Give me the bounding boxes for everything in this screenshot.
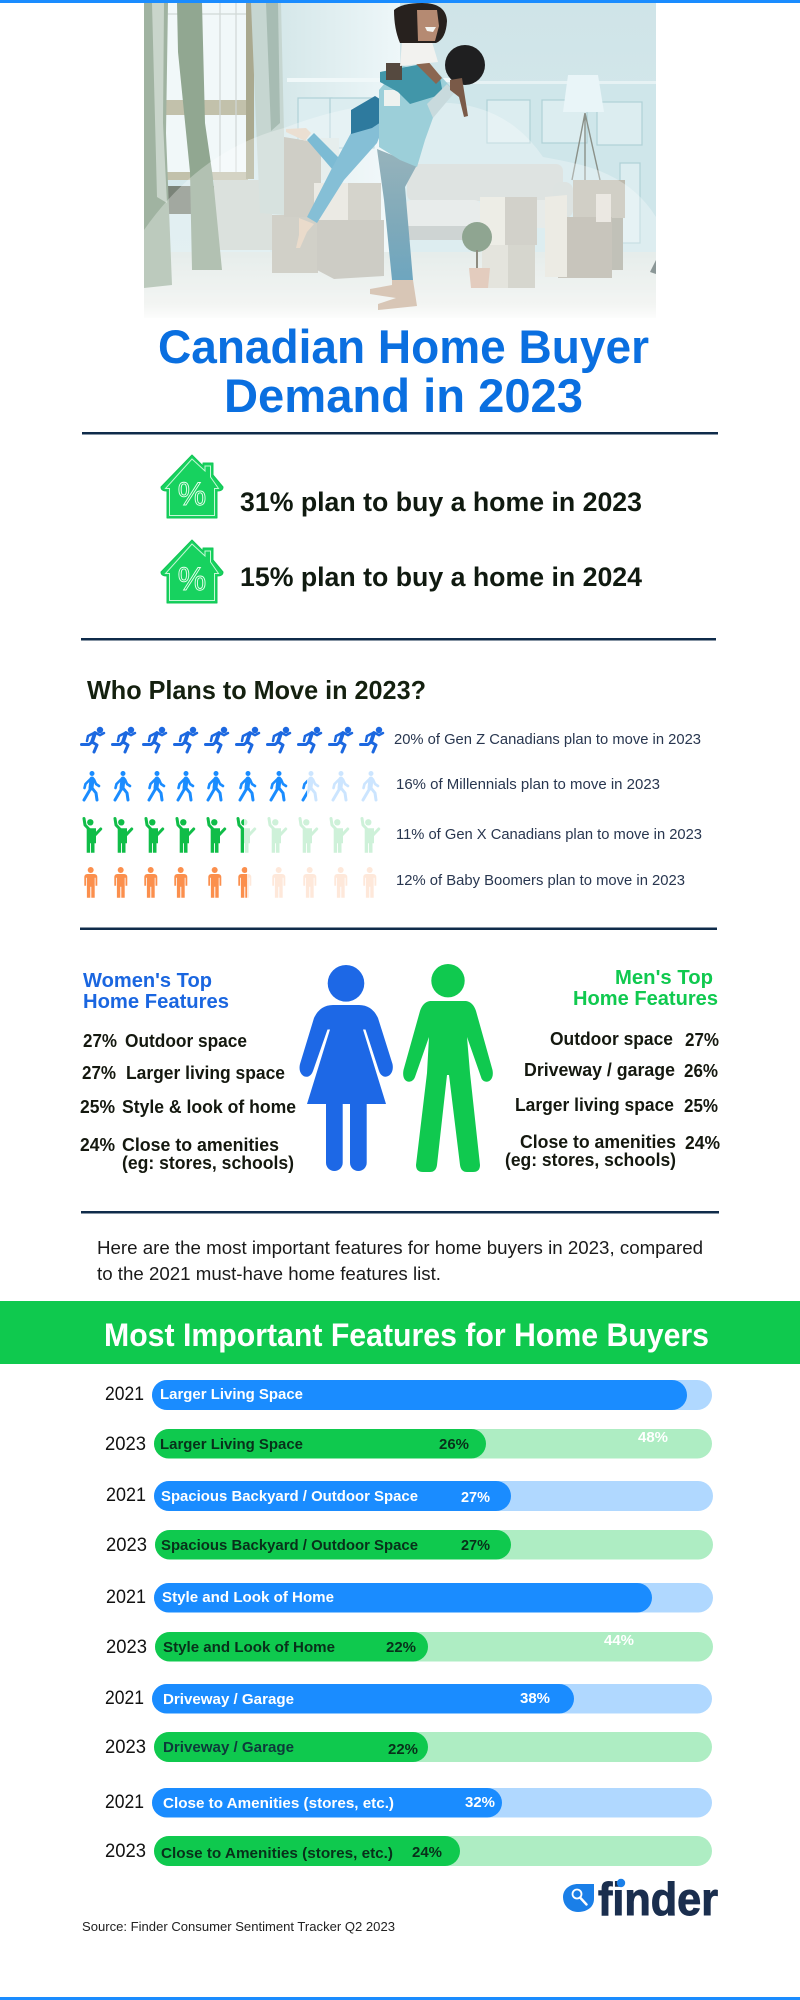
bar: Larger Living Space 2023: 2023 <box>105 1434 146 1455</box>
bar: Style and Look 2023: 2023 <box>106 1637 147 1658</box>
bar: Driveway 2021: 2021 <box>105 1688 144 1709</box>
bar: Style and Look 2021 <box>106 1583 713 1612</box>
pictogram row: Millennials <box>84 771 660 800</box>
heading: men's: Home Features <box>573 988 718 1010</box>
intro paragraph <box>97 1238 703 1284</box>
bar: Driveway 2021 <box>105 1684 712 1714</box>
women's list: Outdoor space <box>125 1031 247 1051</box>
bar: Spacious Backyard 2021: 27% <box>461 1489 490 1506</box>
bar: Driveway 2021: Driveway / Garage <box>163 1691 294 1708</box>
men's list: Driveway / garage <box>524 1060 675 1080</box>
bar: Driveway 2023 <box>105 1732 712 1762</box>
banner: most important features <box>0 1301 800 1364</box>
women's list: 27% <box>82 1063 116 1083</box>
men's list: Larger living space <box>515 1095 674 1115</box>
couple figures <box>286 3 485 310</box>
bar: Style and Look 2021: Style and Look of Home <box>162 1589 334 1606</box>
bar: Larger Living Space 2023 <box>105 1429 712 1458</box>
stat: 31% plan to buy in 2023: 31% plan to buy a home in 2023 <box>240 487 642 517</box>
top accent bar <box>0 0 800 3</box>
bar: Larger Living Space 2021: Larger Living Space <box>160 1386 303 1403</box>
bar: Driveway 2023: 2023 <box>105 1737 146 1758</box>
hero photo: couple celebrating among moving boxes <box>144 3 656 318</box>
women's list: Larger living space <box>126 1063 285 1083</box>
bar: Spacious Backyard 2023: 2023 <box>106 1535 147 1556</box>
women's list: Style & look of home <box>122 1097 296 1117</box>
women's list: (eg: stores, schools) <box>122 1153 294 1173</box>
bar: Close to Amenities 2021 <box>105 1788 712 1818</box>
stat: 15% plan to buy in 2024: 15% plan to buy a home in 2024 <box>240 562 642 592</box>
heading: men's: Men's Top <box>615 967 713 989</box>
heading: women's: Home Features <box>83 991 229 1013</box>
men's list: 25% <box>684 1096 718 1116</box>
bar: Larger Living Space 2023: 48% <box>638 1429 668 1446</box>
title: Demand in 2023 <box>224 369 583 422</box>
stat: 15% plan to buy in 2024 <box>161 540 642 603</box>
pictogram row: Gen Z <box>82 727 701 752</box>
men's list: 24% <box>685 1133 720 1153</box>
bar: Spacious Backyard 2021 <box>106 1481 713 1511</box>
bar: Larger Living Space 2021: 2021 <box>105 1384 144 1405</box>
bar: Close to Amenities 2023: 24% <box>412 1844 442 1861</box>
bar: Close to Amenities 2023: 2023 <box>105 1841 146 1862</box>
title: Canadian Home Buyer <box>158 320 649 373</box>
bar: Spacious Backyard 2021: Spacious Backyard / Outdoor Space <box>161 1488 418 1505</box>
men's list <box>505 1029 720 1170</box>
bar: Driveway 2021: 38% <box>520 1690 550 1707</box>
bar: Style and Look 2023: Style and Look of Home <box>163 1639 335 1656</box>
icon: green house with percent: % <box>178 476 206 512</box>
bar: Close to Amenities 2023 <box>105 1836 712 1866</box>
bar: Style and Look 2023: 44% <box>604 1632 634 1649</box>
intro paragraph: to the 2021 must-have home features list. <box>97 1264 441 1284</box>
heading: women's: Women's Top <box>83 970 212 992</box>
bar: Close to Amenities 2023: Close to Amenities (stores, etc.) <box>161 1845 393 1862</box>
bar: Style and Look 2023: 22% <box>386 1639 416 1656</box>
bar: Style and Look 2023 <box>106 1632 713 1662</box>
men's list: 26% <box>684 1061 718 1081</box>
bar: Driveway 2023: Driveway / Garage <box>163 1739 294 1756</box>
pictogram row: Gen X: 11% of Gen X Canadians plan to move in 2023 <box>396 827 702 843</box>
bar: Close to Amenities 2021: 32% <box>465 1794 495 1811</box>
title <box>158 320 649 422</box>
bar: Spacious Backyard 2023: Spacious Backyard / Outdoor Space <box>161 1537 418 1554</box>
women's list <box>80 1031 296 1173</box>
logo: finder: finder <box>598 1873 718 1925</box>
icon: green house with percent <box>161 455 223 518</box>
bar: Close to Amenities 2021: 2021 <box>105 1792 144 1813</box>
pictogram row: Millennials: 16% of Millennials plan to move in 2023 <box>396 777 660 793</box>
heading: men's <box>573 967 718 1010</box>
intro paragraph: Here are the most important features for home buyers in 2023, compared <box>97 1238 703 1258</box>
women's list: 27% <box>83 1031 117 1051</box>
women's list: 24% <box>80 1135 115 1155</box>
heading: women's <box>83 970 229 1013</box>
heading: who plans to move: Who Plans to Move in 2023? <box>87 675 426 705</box>
men's list: Outdoor space <box>550 1029 673 1049</box>
bar: Close to Amenities 2021: Close to Amenities (stores, etc.) <box>163 1795 394 1812</box>
pictogram row: Baby Boomers <box>84 867 685 898</box>
bar: Spacious Backyard 2023 <box>106 1530 713 1560</box>
icon: woman figure <box>300 965 393 1171</box>
source note: Source: Finder Consumer Sentiment Tracker Q2 2023 <box>82 1919 395 1934</box>
women's list: Close to amenities <box>122 1135 279 1155</box>
panel: men's top home features <box>505 967 720 1170</box>
women's list: 25% <box>80 1097 115 1117</box>
icon: green house with percent <box>161 540 223 603</box>
bar: Style and Look 2021: 2021 <box>106 1587 146 1608</box>
men's list: Close to amenities <box>520 1132 676 1152</box>
banner: most important features: Most Important Features for Home Buyers <box>104 1317 709 1353</box>
pictogram row: Gen X <box>84 818 702 853</box>
stat: 31% plan to buy in 2023 <box>161 455 642 518</box>
men's list: (eg: stores, schools) <box>505 1150 676 1170</box>
bar: Larger Living Space 2023: 26% <box>439 1436 469 1453</box>
bar: Driveway 2023: 22% <box>388 1741 418 1758</box>
pictogram row: Baby Boomers: 12% of Baby Boomers plan to move in 2023 <box>396 873 685 889</box>
icon: man figure <box>403 964 493 1172</box>
icon: green house with percent: % <box>178 561 206 597</box>
men's list: 27% <box>685 1030 719 1050</box>
bar: Spacious Backyard 2021: 2021 <box>106 1485 146 1506</box>
bar: Spacious Backyard 2023: 27% <box>461 1537 490 1554</box>
bottom accent bar <box>0 1997 800 2000</box>
bar: Larger Living Space 2023: Larger Living Space <box>160 1436 303 1453</box>
pictogram row: Gen Z: 20% of Gen Z Canadians plan to move in 2023 <box>394 732 701 748</box>
panel: women's top home features <box>80 970 296 1173</box>
bar: Larger Living Space 2021 <box>105 1380 712 1410</box>
